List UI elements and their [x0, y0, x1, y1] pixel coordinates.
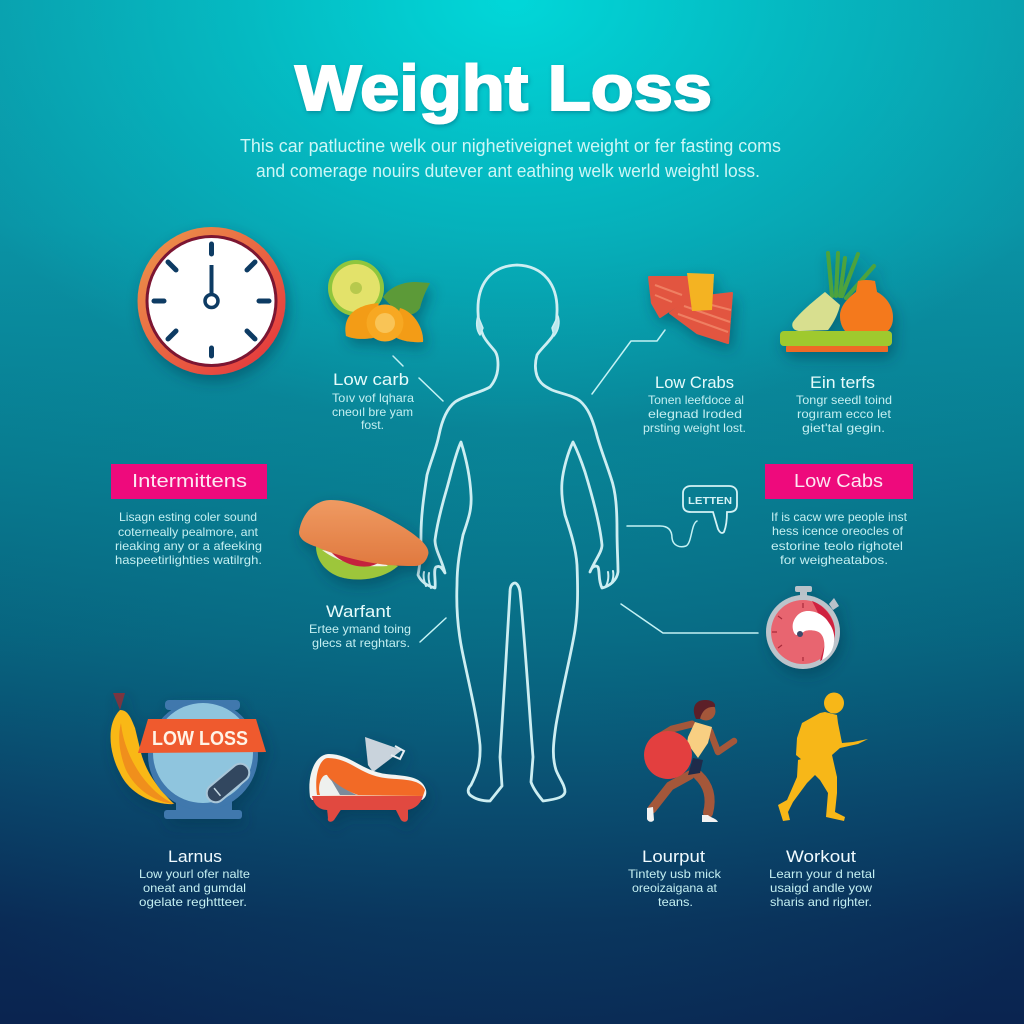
label: low carb: Toıv vof lqhara	[332, 391, 414, 405]
label: warfant: Warfant	[326, 602, 391, 621]
icon: runner with ball	[644, 700, 734, 822]
panel: intermittens: haspeetirlighties watilrgh.	[115, 553, 262, 567]
label: low carb: fost.	[361, 418, 384, 432]
label: low crabs: Low Crabs	[655, 373, 734, 392]
icon: vegetables	[780, 253, 893, 352]
label: low crabs	[643, 373, 746, 435]
label: ein terfs	[796, 373, 892, 435]
label: larnus: Low yourl ofer nalte	[139, 867, 250, 881]
icon: jar with banana: LOW LOSS	[152, 728, 248, 750]
label: lourput: teans.	[658, 895, 693, 909]
panel: low cabs: If is cacw wre people inst	[771, 510, 908, 524]
label: larnus: Larnus	[168, 847, 222, 866]
label: workout: Workout	[786, 847, 856, 866]
label: low crabs: prsting weight lost.	[643, 421, 746, 435]
label: lourput	[628, 847, 722, 909]
panel: intermittens: Lisagn esting coler sound	[119, 510, 257, 524]
label: larnus	[139, 847, 250, 909]
label: low crabs: Tonen leefdoce al	[648, 393, 744, 407]
panel: intermittens: rieaking any or a afeeking	[115, 539, 262, 553]
intro text: and comerage nouirs dutever ant eathing welk werld weightl loss.	[256, 161, 760, 181]
icon: speech bubble	[683, 486, 737, 533]
panel: low cabs: hess icence oreocles of	[772, 524, 904, 538]
label: ein terfs: giet'tal gegin.	[802, 421, 885, 435]
icon: salmon and cheese	[649, 273, 732, 343]
label: workout: usaigd andle yow	[770, 881, 872, 895]
label: workout: sharis and righter.	[770, 895, 872, 909]
label: workout	[769, 847, 875, 909]
icon: citrus fruit	[328, 260, 430, 342]
icon: stopwatch	[766, 586, 840, 669]
panel: low cabs: for weigheatabos.	[780, 553, 888, 567]
icon: walking silhouette	[778, 692, 868, 821]
icon: speech bubble: LETTEN	[688, 496, 732, 507]
connector lines	[393, 330, 758, 642]
title: Weight Loss	[295, 52, 712, 124]
panel: intermittens: coterneally pealmore, ant	[118, 525, 259, 539]
panel: intermittens: Intermittens	[132, 471, 247, 491]
label: ein terfs: rogıram ecco let	[797, 407, 892, 421]
intro text: This car patluctine welk our nighetiveignet weight or fer fasting coms	[240, 136, 781, 156]
label: lourput: Tintety usb mick	[628, 867, 722, 881]
label: ein terfs: Tongr seedl toind	[796, 393, 892, 407]
icon: jar with banana	[111, 693, 266, 819]
icon: sandwich	[299, 500, 428, 580]
body outline	[418, 265, 618, 801]
label: ein terfs: Ein terfs	[810, 373, 875, 392]
panel: intermittens	[111, 464, 267, 567]
icon: bathtub	[309, 737, 426, 822]
label: workout: Learn your d netal	[769, 867, 875, 881]
label: larnus: ogelate reghttteer.	[139, 895, 247, 909]
label: larnus: oneat and gumdal	[143, 881, 246, 895]
label: warfant: glecs at reghtars.	[312, 636, 410, 650]
label: warfant	[309, 602, 411, 650]
label: low carb: Low carb	[333, 370, 409, 389]
panel: low cabs: estorine teolo righotel	[771, 539, 903, 553]
panel: low cabs: Low Cabs	[794, 471, 883, 491]
label: lourput: oreoizaigana at	[632, 881, 718, 895]
label: low crabs: elegnad lroded	[648, 407, 742, 421]
intro text	[240, 136, 781, 181]
label: low carb	[332, 370, 414, 432]
label: low carb: cneoıl bre yam	[332, 405, 413, 419]
label: lourput: Lourput	[642, 847, 705, 866]
label: warfant: Ertee ymand toing	[309, 622, 411, 636]
panel: low cabs	[765, 464, 913, 567]
icon: clock	[138, 227, 286, 375]
